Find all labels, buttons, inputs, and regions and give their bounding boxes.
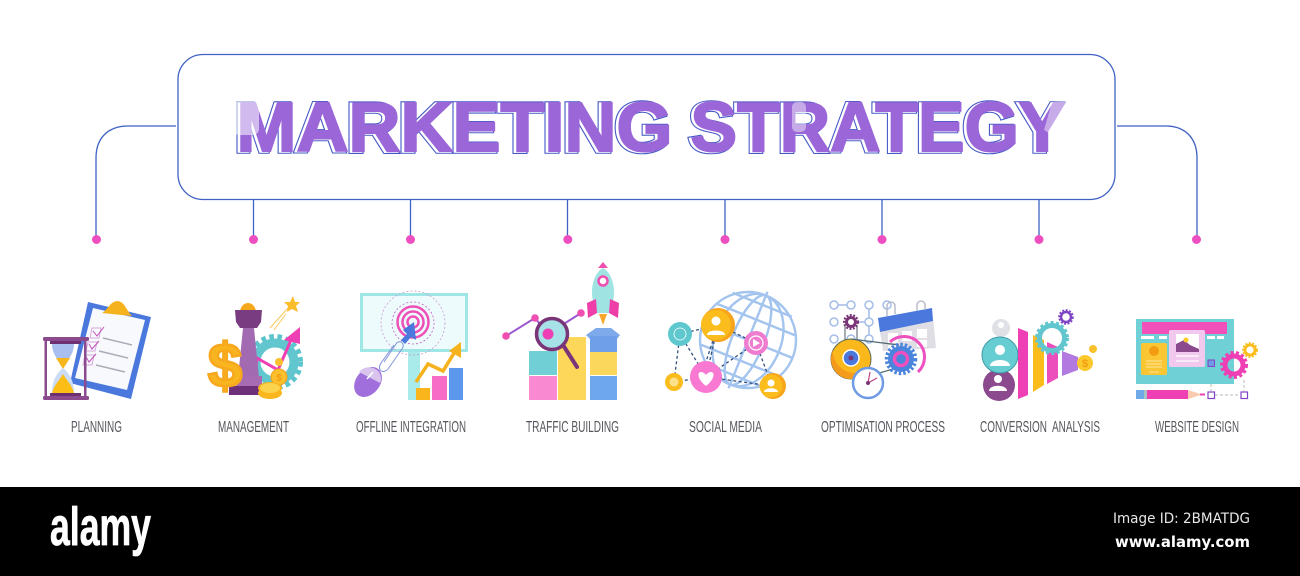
- title frame: [178, 54, 1115, 200]
- label: website design: WEBSITE DESIGN: [1155, 419, 1239, 436]
- footer image id: Image ID: 2BMATDG: [1113, 511, 1250, 527]
- title: STRATEGY: [688, 89, 1063, 167]
- icon: management: [208, 296, 300, 401]
- connector lines: [96, 126, 1197, 239]
- icon: management: $: [276, 373, 282, 384]
- footer bar: [0, 487, 1300, 576]
- icon: offline integration: [348, 291, 466, 402]
- icon: traffic building: [502, 262, 620, 400]
- title: MARKETING: [234, 89, 670, 167]
- label: planning: PLANNING: [71, 419, 122, 436]
- title: STRATEGY: [690, 88, 1066, 166]
- icon: website design: [1136, 319, 1257, 399]
- title: [233, 88, 1066, 167]
- label: management: MANAGEMENT: [218, 419, 289, 436]
- label: conversion analysis: CONVERSION ANALYSIS: [980, 419, 1100, 436]
- icon: conversion analysis: [982, 310, 1097, 401]
- label: offline integration: OFFLINE INTEGRATION: [356, 419, 466, 436]
- icon: management: $: [208, 332, 242, 401]
- label: social media: SOCIAL MEDIA: [689, 419, 762, 436]
- icon: conversion analysis: $: [1082, 358, 1088, 370]
- title: MARKETING: [236, 88, 672, 166]
- icon: optimisation process: [830, 301, 936, 398]
- icon: planning: [43, 301, 151, 400]
- connector dots: [92, 235, 1201, 244]
- title: MARKETING: [234, 89, 670, 167]
- label: optimisation process: OPTIMISATION PROCESS: [821, 419, 945, 436]
- footer logo: alamy: [50, 497, 151, 557]
- footer url: www.alamy.com: [1115, 533, 1250, 551]
- title: STRATEGY: [688, 89, 1063, 167]
- label: traffic building: TRAFFIC BUILDING: [526, 419, 619, 436]
- icon: social media: [665, 274, 812, 406]
